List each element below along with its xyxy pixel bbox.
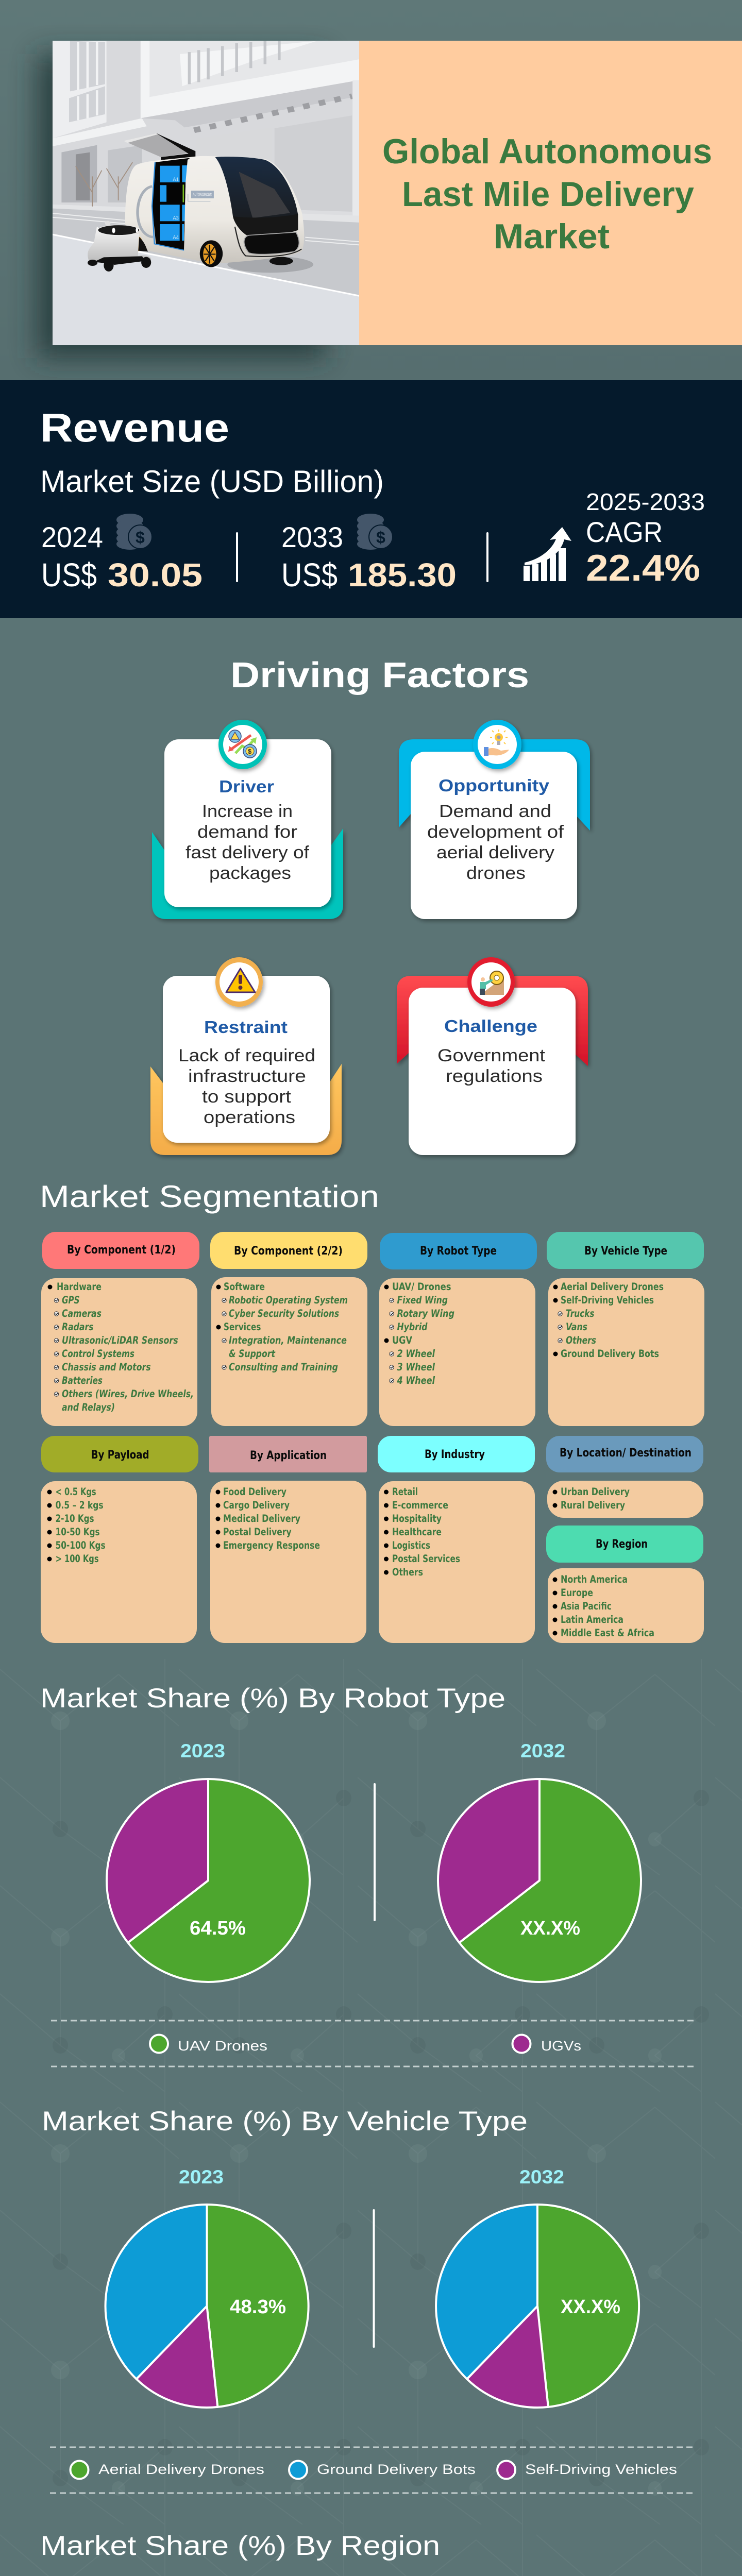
icon: driver badge: $ (248, 748, 252, 755)
photo: autonomous delivery van and robot (53, 41, 359, 345)
panel: by component 1/2: By Component (1/2) (67, 1244, 176, 1257)
component 1 list: Control Systems (62, 1348, 134, 1360)
legend: UAV Drones (178, 2038, 267, 2054)
robot type list: 3 Wheel (397, 1361, 435, 1373)
region list: Europe (561, 1587, 593, 1599)
component 2 list: Cyber Security Solutions (229, 1308, 339, 1319)
title: Global Autonomous (382, 132, 712, 171)
heading: Market Share (%) By Vehicle Type (42, 2106, 528, 2137)
photo: autonomous delivery van and robot: A1 (173, 177, 179, 182)
pie values: XX.X% (520, 1918, 580, 1939)
component 2 list: Software (224, 1281, 265, 1293)
card: driver (152, 720, 343, 919)
component 1 list: Others (Wires, Drive Wheels, (62, 1388, 194, 1400)
industry list: Logistics (392, 1539, 430, 1551)
panel: by component 2/2 (210, 1232, 367, 1426)
title: Market (494, 217, 610, 256)
icon: driver badge (218, 720, 267, 769)
component 1 list: Batteries (62, 1375, 103, 1386)
payload list: > 100 Kgs (56, 1553, 99, 1565)
icon: coins 2033: $ (376, 528, 385, 547)
panel: by vehicle type: By Vehicle Type (584, 1245, 667, 1258)
robot type list: UAV/ Drones (392, 1281, 451, 1293)
opportunity text (427, 802, 564, 883)
application list: Cargo Delivery (223, 1499, 290, 1511)
component 1 list: Radars (62, 1321, 94, 1333)
location list: Urban Delivery (561, 1486, 630, 1498)
year labels: 2023 (179, 2166, 224, 2188)
heading: Market Share (%) By Region (40, 2531, 440, 2561)
stat: 2033: 2033 (281, 521, 343, 553)
legend: Self-Driving Vehicles (525, 2462, 677, 2477)
opportunity title: Opportunity (439, 776, 550, 795)
restraint text: to support (202, 1087, 292, 1107)
icon: restraint badge (215, 957, 263, 1007)
component 1 list: and Relays) (62, 1401, 115, 1413)
application list (215, 1486, 320, 1551)
robot type list: 4 Wheel (397, 1375, 435, 1386)
component 1 list: Ultrasonic/LiDAR Sensors (62, 1334, 178, 1346)
industry list: Retail (392, 1486, 418, 1498)
opportunity text: aerial delivery (436, 843, 554, 862)
panel: by vehicle type (547, 1232, 704, 1426)
vehicle type list: Others (566, 1334, 596, 1346)
card: opportunity (399, 720, 590, 919)
payload list: 2-10 Kgs (56, 1513, 94, 1524)
robot type list: UGV (392, 1334, 412, 1346)
robot type list (384, 1281, 454, 1386)
payload list: 0.5 – 2 kgs (56, 1499, 104, 1511)
panel: by region: By Region (596, 1538, 648, 1551)
icon: coins 2024: $ (136, 528, 145, 547)
photo: autonomous delivery van and robot: AUTONOMOUS (192, 192, 212, 197)
stat: 2033: US$ (281, 556, 338, 594)
challenge text: regulations (446, 1066, 543, 1086)
panel: by robot type (379, 1233, 537, 1426)
divider (486, 532, 488, 582)
year labels: 2023 (180, 1740, 225, 1761)
icon: coins 2033 (357, 514, 393, 550)
driver title: Driver (219, 777, 274, 796)
icon: challenge badge (467, 957, 515, 1007)
driver text: fast delivery of (185, 843, 310, 862)
stat: CAGR: CAGR (586, 516, 663, 548)
driver text: packages (209, 863, 291, 883)
industry list: Hospitality (392, 1513, 442, 1524)
pie values: 64.5% (190, 1918, 246, 1939)
robot type list: Hybrid (397, 1321, 428, 1333)
component 1 list: Cameras (62, 1308, 102, 1319)
payload list (47, 1486, 106, 1565)
legend: Ground Delivery Bots (317, 2462, 476, 2477)
panel: by application (209, 1436, 367, 1643)
component 2 list (216, 1281, 348, 1373)
revenue band (0, 380, 742, 618)
panel: by payload (41, 1436, 198, 1643)
vehicle type list: Ground Delivery Bots (561, 1348, 659, 1360)
region list: Middle East & Africa (561, 1627, 654, 1639)
challenge text (437, 1046, 546, 1086)
restraint text: Lack of required (178, 1046, 315, 1065)
vehicle type list: Aerial Delivery Drones (561, 1281, 664, 1293)
card: restraint (150, 957, 342, 1155)
application list: Emergency Response (223, 1539, 320, 1551)
panel: by industry: By Industry (425, 1448, 485, 1461)
legend: UGVs (541, 2038, 581, 2054)
industry list: E-commerce (392, 1499, 448, 1511)
component 2 list: Integration, Maintenance (229, 1334, 347, 1346)
panel: by component 2/2: By Component (2/2) (234, 1245, 343, 1258)
region list: Asia Pacific (561, 1600, 612, 1612)
panel: by application: By Application (250, 1449, 327, 1462)
vehicle type list: Trucks (566, 1308, 595, 1319)
component 1 list: Hardware (57, 1281, 102, 1293)
component 1 list: Chassis and Motors (62, 1361, 151, 1373)
panel: by region (546, 1526, 704, 1643)
opportunity text: Demand and (439, 802, 551, 821)
pie values: 48.3% (230, 2296, 286, 2318)
legend: Aerial Delivery Drones (98, 2462, 264, 2477)
pie chart 2032 (438, 1779, 641, 1982)
payload list: 10-50 Kgs (56, 1526, 100, 1538)
pie values: XX.X% (561, 2296, 620, 2318)
legend (70, 2461, 677, 2479)
restraint title: Restraint (204, 1018, 288, 1037)
section: market share by vehicle type (42, 2106, 694, 2493)
divider (236, 532, 238, 582)
legend (150, 2035, 581, 2054)
driver text: Increase in (202, 802, 293, 821)
heading: market segmentation: Market Segmentation (40, 1179, 379, 1214)
component 1 list: GPS (62, 1294, 79, 1306)
industry list: Healthcare (392, 1526, 442, 1538)
robot type list: 2 Wheel (397, 1348, 435, 1360)
panel: by robot type: By Robot Type (420, 1245, 497, 1258)
region list: North America (561, 1573, 628, 1585)
year labels (179, 2166, 564, 2188)
market size subtitle: Market Size (USD Billion) (40, 464, 384, 499)
opportunity text: development of (427, 822, 564, 842)
year labels: 2032 (520, 1740, 565, 1761)
industry list: Others (392, 1566, 423, 1578)
stat: 2033: 185.30 (348, 556, 457, 594)
icon: coins 2024 (116, 514, 152, 550)
stat: 2024 (41, 521, 203, 594)
pie chart 2023 (106, 2205, 309, 2408)
opportunity text: drones (466, 863, 526, 883)
driver text: demand for (197, 822, 297, 842)
stat: 2024: US$ (41, 556, 97, 594)
component 2 list: Robotic Operating System (229, 1294, 348, 1306)
photo: autonomous delivery van and robot: A3 (173, 215, 179, 221)
challenge title: Challenge (444, 1016, 537, 1036)
payload list: 50-100 Kgs (56, 1539, 106, 1551)
vehicle type list (553, 1281, 664, 1360)
payload list: < 0.5 Kgs (56, 1486, 96, 1498)
location list (552, 1486, 630, 1511)
vehicle type list: Vans (566, 1321, 587, 1333)
vehicle type list: Self-Driving Vehicles (561, 1294, 654, 1306)
stat: CAGR: 2025-2033 (586, 488, 705, 515)
title (382, 132, 712, 256)
component 2 list: & Support (229, 1348, 276, 1360)
application list: Medical Delivery (223, 1513, 300, 1524)
region list (552, 1573, 654, 1639)
pie chart 2023 (107, 1779, 310, 1982)
revenue heading: Revenue (40, 405, 229, 450)
panel: by location (546, 1436, 703, 1518)
panel: by location: By Location/ Destination (560, 1447, 692, 1460)
industry list (384, 1486, 460, 1578)
application list: Postal Delivery (223, 1526, 292, 1538)
application list: Food Delivery (223, 1486, 286, 1498)
year labels (180, 1740, 565, 1761)
stat: CAGR: 22.4% (586, 548, 700, 589)
robot type list: Fixed Wing (397, 1294, 448, 1306)
restraint text: infrastructure (188, 1066, 306, 1086)
year labels: 2032 (519, 2166, 564, 2188)
robot type list: Rotary Wing (397, 1308, 454, 1319)
title panel (359, 41, 742, 345)
component 2 list: Consulting and Training (229, 1361, 338, 1373)
header hero (37, 41, 742, 358)
panel: by industry (378, 1436, 535, 1643)
pie values (230, 2296, 620, 2318)
panel: by component 1/2 (41, 1232, 199, 1426)
stat: 2024: 30.05 (108, 556, 203, 594)
component 1 list (47, 1281, 194, 1413)
restraint text: operations (204, 1108, 295, 1127)
stat: CAGR (586, 488, 705, 589)
stat: 2033 (281, 521, 457, 594)
component 2 list: Services (224, 1321, 261, 1333)
location list: Rural Delivery (561, 1499, 625, 1511)
panel: by payload: By Payload (91, 1449, 149, 1462)
pie values (190, 1918, 580, 1939)
challenge text: Government (437, 1046, 546, 1065)
pie chart 2032 (436, 2205, 639, 2408)
photo: autonomous delivery van and robot: A4 (173, 235, 179, 241)
region list: Latin America (561, 1614, 623, 1625)
section: market share by robot type (40, 1683, 695, 2066)
card: challenge (397, 957, 588, 1155)
icon: growth chart arrow (524, 527, 571, 581)
stat: 2024: 2024 (41, 521, 103, 553)
driver text (185, 802, 310, 883)
heading: Market Share (%) By Robot Type (40, 1683, 505, 1714)
industry list: Postal Services (392, 1553, 460, 1565)
title: Last Mile Delivery (402, 175, 694, 214)
heading: driving factors: Driving Factors (230, 655, 529, 695)
restraint text (178, 1046, 315, 1127)
icon: opportunity badge (473, 720, 521, 769)
